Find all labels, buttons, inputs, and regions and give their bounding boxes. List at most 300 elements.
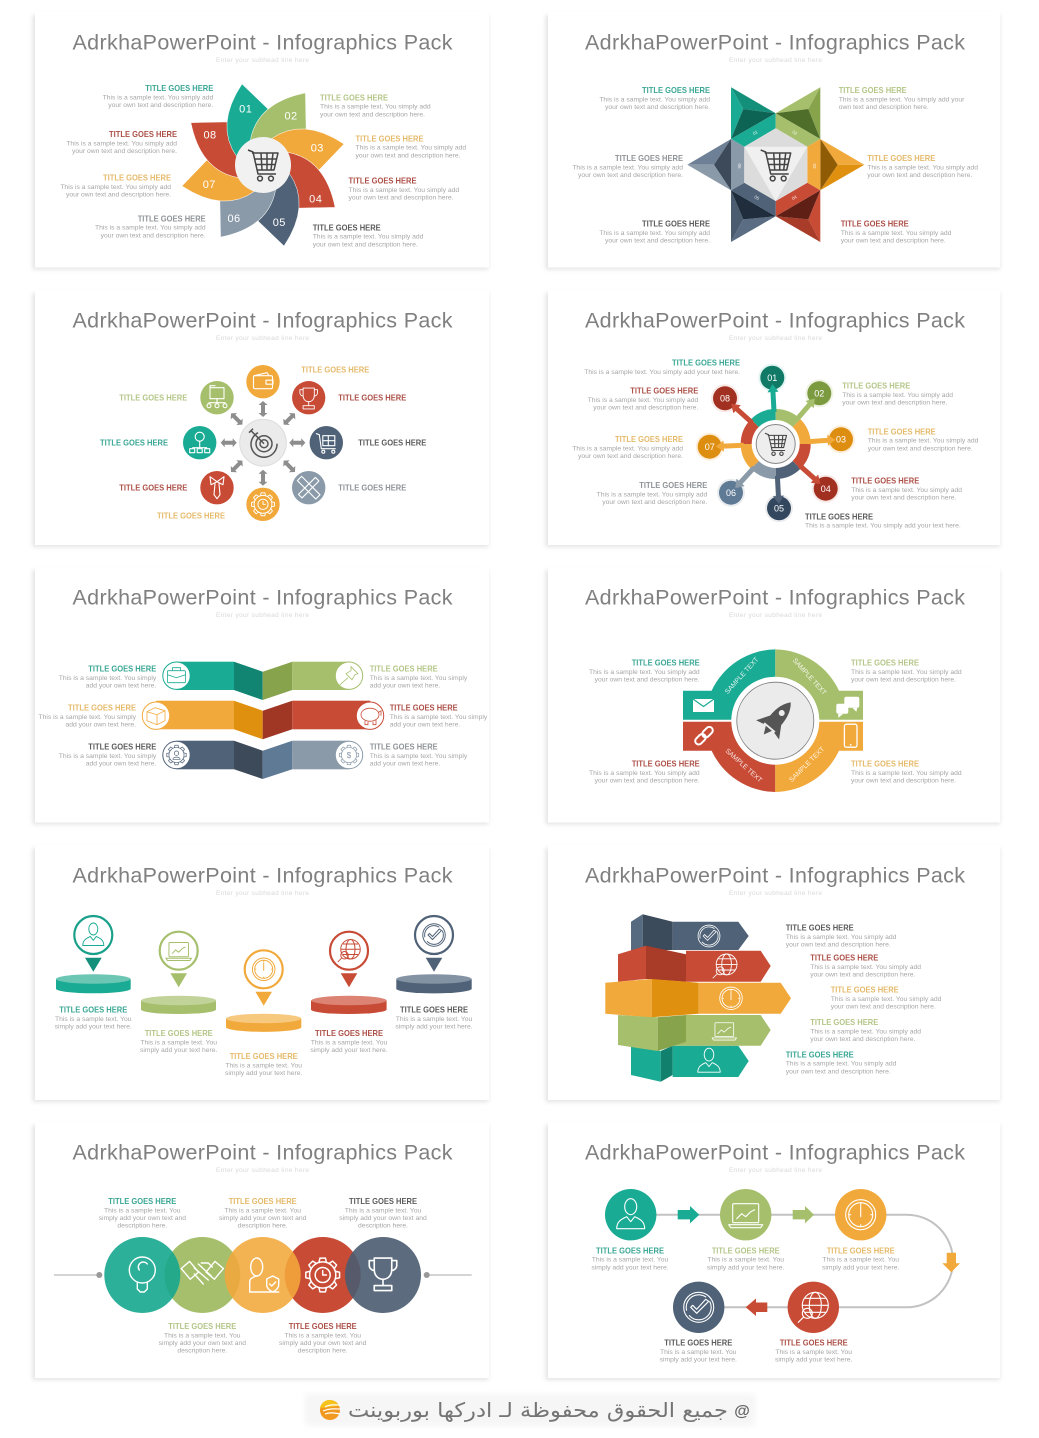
text block 02: This is a sample text. You simply add [320,104,431,111]
text block 2 [159,1321,246,1355]
text block 3: simply add your own text and [219,1215,307,1222]
text block bottom right: TITLE GOES HERE [851,759,919,769]
text block 02: This is a sample text. You simply add your [839,96,965,103]
label: gray tools: TITLE GOES HERE [338,483,407,493]
subheading: Enter your subhead line here [216,335,309,342]
text block 08: TITLE GOES HERE [630,386,699,396]
subheading: Enter your subhead line here [729,890,822,897]
text block 04 [348,176,459,202]
text block 2: simply add your text here. [140,1047,217,1054]
segment labels: SAMPLE TEXT [724,748,763,784]
text block 04: TITLE GOES HERE [841,219,909,229]
icon: gear clock [306,1258,340,1292]
text block 04: This is a sample text. You simply add [348,187,459,194]
icon: trophy [292,381,325,414]
layer: teal [631,1046,749,1082]
panel: slide 2 star [546,12,1000,270]
text block 02: TITLE GOES HERE [842,381,911,391]
text block green: This is a sample text. You simply add [810,1028,921,1035]
text block 2: simply add your own text and [159,1340,246,1347]
text block orange: This is a sample text. You [822,1257,899,1264]
text block 1 [55,1005,132,1031]
text block bottom right: This is a sample text. You simply [370,753,468,760]
ring [741,409,811,479]
text block 04: your own text and description here. [841,238,946,245]
subheading: Enter your subhead line here [729,1167,822,1174]
text block bottom right: TITLE GOES HERE [370,742,438,752]
text block 07: TITLE GOES HERE [615,434,683,444]
icon: check [698,925,720,947]
text block teal: This is a sample text. You [592,1257,669,1264]
petal numbers [203,104,324,229]
arrow teal [678,1206,699,1223]
icon: center target [240,419,286,466]
node numbers: 03 [836,435,846,445]
icon: envelope [693,699,714,712]
text block 03: your own text and description here. [867,172,972,179]
text block bottom left [589,759,700,785]
layer: orange [605,979,791,1017]
text block 01 [103,83,214,109]
text block middle right [390,703,488,729]
text block 04 [851,476,962,502]
text block 05: TITLE GOES HERE [642,219,710,229]
pin 2 [141,932,216,1014]
text block 5: TITLE GOES HERE [400,1005,468,1015]
text block 06: This is a sample text. You simply add [95,225,206,232]
text block orange: simply add your text here. [822,1264,899,1271]
text block teal: This is a sample text. You simply add [786,1061,897,1068]
node numbers: 05 [774,504,784,514]
segment labels: SAMPLE TEXT [788,746,826,784]
icon: tools [292,471,325,504]
petal numbers: 05 [273,217,286,229]
text block green: This is a sample text. You [707,1257,784,1264]
text block green: simply add your text here. [707,1264,784,1271]
text block top right [370,664,468,690]
text block top right: TITLE GOES HERE [851,658,919,668]
text block 1: TITLE GOES HERE [108,1196,177,1206]
text block 06 [572,153,683,179]
double arrows [221,401,305,486]
heading: AdrkhaPowerPoint - Infographics Pack [72,308,453,332]
label: red trophy: TITLE GOES HERE [338,392,407,402]
text block teal: TITLE GOES HERE [596,1245,664,1255]
text block 3: TITLE GOES HERE [229,1196,297,1206]
icon: cart [310,426,343,459]
text block 5: simply add your text here. [395,1024,473,1031]
segment: green [775,649,863,720]
facet numbers: 02 [791,129,799,136]
text block 03: your own text and description here. [356,152,461,159]
text block bottom right [851,759,962,785]
text block middle left: add your own text here. [65,722,136,729]
text block 02: your own text and description here. [842,400,947,407]
text block top left [589,658,700,684]
text block 3: description here. [238,1223,288,1230]
node orange clock [835,1189,886,1240]
panel: slide 3 radial icons [32,290,489,547]
text block top right: TITLE GOES HERE [370,664,438,674]
text block 06 [95,213,206,239]
text block 03 [867,153,978,179]
icon: shopping cart [248,150,278,181]
subheading: Enter your subhead line here [729,335,822,342]
ribbon row 1 [176,662,349,700]
text block 4: TITLE GOES HERE [315,1028,383,1038]
text block 04: TITLE GOES HERE [348,176,417,186]
text block 02 [320,92,431,118]
node green laptop [720,1189,771,1240]
heading: AdrkhaPowerPoint - Infographics Pack [585,308,965,332]
text block bottom right: add your own text here. [370,761,440,768]
facet numbers: 03 [812,163,817,169]
text block 04: your own text and description here. [851,495,956,502]
text block 1 [99,1196,186,1230]
icon: light bulb [129,1257,155,1292]
text block red: TITLE GOES HERE [780,1338,848,1348]
text block top left: add your own text here. [86,683,156,690]
text block 01: This is a sample text. You simply add [599,96,710,103]
pin 4 [311,932,387,1014]
text block 4: simply add your own text and [279,1340,367,1347]
text block green [810,1017,921,1043]
icon: phone [844,724,857,747]
text block 07 [572,434,683,460]
text block 04: This is a sample text. You simply add [851,487,962,494]
text block 2: description here. [177,1348,227,1355]
icon: person [698,1048,720,1072]
text block 08 [66,129,177,155]
heading: AdrkhaPowerPoint - Infographics Pack [585,1140,965,1164]
heading: AdrkhaPowerPoint - Infographics Pack [72,586,453,610]
text block 1: This is a sample text. You [55,1016,132,1023]
text block top right: This is a sample text. You simply [370,675,468,682]
node numbers: 02 [814,389,824,399]
segment: red [683,722,775,792]
icon: laptop [712,1023,737,1040]
arrow green [793,1206,814,1223]
heading: AdrkhaPowerPoint - Infographics Pack [72,864,453,888]
node numbers: 06 [726,488,736,498]
facet numbers: 06 [737,163,742,169]
icon: shopping cart [761,150,791,181]
text block 05: This is a sample text. You simply add [313,234,424,241]
text block 5: This is a sample text. You [345,1207,422,1214]
petal numbers: 01 [239,104,252,116]
text block 07: your own text and description here. [66,192,171,199]
hub center [752,420,800,468]
text block 3: TITLE GOES HERE [230,1051,298,1061]
icon: tie [200,471,234,504]
text block middle right: add your own text here. [390,722,460,729]
text block dark [786,923,897,949]
icon: briefcase [163,662,190,689]
text block 07: This is a sample text. You simply add [572,445,683,452]
text block 05 [313,222,424,248]
footer: copyright strip [305,1394,755,1426]
segment: orange [775,722,863,792]
text block red: your own text and description here. [810,972,915,979]
text block 2: This is a sample text. You [140,1039,217,1046]
text block 01: TITLE GOES HERE [642,85,710,95]
text block 4: TITLE GOES HERE [289,1321,357,1331]
text block 05: your own text and description here. [313,241,418,248]
connector left [54,1272,102,1278]
icon: pushpin [335,662,363,689]
node numbers: 04 [821,484,831,494]
petal numbers: 07 [203,179,216,191]
layer: red [618,946,771,982]
icon: wallet [246,365,280,398]
text block 08: your own text and description here. [72,148,177,155]
petal numbers: 06 [227,213,241,225]
text block orange: TITLE GOES HERE [831,985,899,995]
text block 05 [805,511,961,530]
text block orange: TITLE GOES HERE [827,1245,895,1255]
subheading: Enter your subhead line here [729,612,822,619]
icon: box [142,702,170,729]
petal numbers: 03 [311,143,324,155]
text block 01: This is a sample text. You simply add your text here. [584,369,740,376]
panel: slide 5 folded ribbons [32,567,489,824]
icon: chat bubbles [836,697,859,718]
text block 08: TITLE GOES HERE [109,129,177,139]
text block 04: your own text and description here. [348,195,454,202]
text block 06: your own text and description here. [101,232,206,239]
panel: slide 10 process path [546,1122,1000,1380]
label: orange top: TITLE GOES HERE [301,364,370,374]
ribbon row 3 [176,741,349,779]
text block 06: TITLE GOES HERE [639,480,708,490]
text block red: TITLE GOES HERE [810,953,879,963]
text block orange: your own text and description here. [831,1004,936,1011]
text block 06: This is a sample text. You simply add [572,164,683,171]
text block 03: This is a sample text. You simply add [356,145,466,152]
connector right [424,1272,472,1278]
text block teal [786,1049,897,1075]
text block 1: simply add your own text and [99,1215,186,1222]
petal numbers: 08 [203,130,217,142]
node dark check [673,1282,724,1333]
text block top right: your own text and description here. [851,677,956,684]
arrow red [746,1298,767,1316]
text block dark: This is a sample text. You [660,1349,737,1356]
text block green: TITLE GOES HERE [712,1245,780,1255]
subheading: Enter your subhead line here [216,890,309,897]
text block 02: own text and description here. [839,104,929,111]
layer: dark [631,914,749,952]
text block 01: This is a sample text. You simply add [103,94,214,101]
icon: trophy [369,1258,397,1290]
text block 3 [225,1051,302,1077]
pin 5 [396,916,472,993]
panel: slide 7 pins on discs [32,845,489,1102]
text block 04: This is a sample text. You simply add [841,230,952,237]
text block teal [591,1245,669,1271]
panel: slide 6 rocket circle [546,567,1000,824]
text block dark: TITLE GOES HERE [664,1338,733,1348]
spoke arrows [716,384,836,504]
text block green: TITLE GOES HERE [810,1017,879,1027]
icon: coin badge [335,741,363,769]
text block 04: TITLE GOES HERE [851,476,920,486]
text block 03: TITLE GOES HERE [356,133,424,143]
node red globe [788,1282,839,1333]
text block 05: TITLE GOES HERE [805,511,873,521]
text block 4: This is a sample text. You [311,1039,388,1046]
text block top left: This is a sample text. You simply add [589,669,700,676]
text block 02 [839,85,965,111]
text block 06: your own text and description here. [578,172,683,179]
text block 1: description here. [117,1223,167,1230]
text block middle right: This is a sample text. You simply [390,714,488,721]
text block red: This is a sample text. You [775,1349,852,1356]
text block bottom right [370,742,468,768]
text block 5: description here. [358,1223,408,1230]
text block bottom left: This is a sample text. You simply [59,753,157,760]
text block 1: This is a sample text. You [104,1207,181,1214]
node numbers: 07 [705,442,715,452]
heading: AdrkhaPowerPoint - Infographics Pack [72,1140,453,1164]
text block orange [831,985,942,1011]
text block 5 [395,1005,473,1031]
text block 03: your own text and description here. [868,445,973,452]
text block 01: TITLE GOES HERE [672,358,740,368]
text block 03: This is a sample text. You simply add [868,438,979,445]
text block top left: your own text and description here. [595,677,700,684]
segment labels: SAMPLE TEXT [724,656,760,696]
text block 08: your own text and description here. [593,405,698,412]
icon: gear [246,488,280,521]
subheading: Enter your subhead line here [216,1167,309,1174]
text block 02 [842,381,953,407]
node numbers [705,373,846,514]
text block 2 [140,1028,217,1054]
text block 3: This is a sample text. You [225,1062,302,1069]
segment labels: SAMPLE TEXT [791,657,827,697]
segment: teal [683,649,775,720]
text block red [810,953,921,979]
text block 4: This is a sample text. You [284,1332,361,1339]
text block dark: This is a sample text. You simply add [786,934,897,941]
node numbers: 01 [767,373,777,383]
text block 05 [599,219,710,245]
segment labels [724,656,827,784]
text block middle right: TITLE GOES HERE [390,703,458,713]
node teal person [605,1189,656,1240]
text block teal: simply add your text here. [591,1264,669,1271]
text block 08: This is a sample text. You simply add [66,140,177,147]
icon: coin badge: $ [347,751,352,760]
subheading: Enter your subhead line here [216,612,309,619]
text block 01: your own text and description here. [605,104,710,111]
text block 4 [310,1028,388,1054]
text block middle left: This is a sample text. You simply [38,714,137,721]
text block 5: This is a sample text. You [396,1016,473,1023]
text block bottom right: This is a sample text. You simply add [851,770,962,777]
text block teal: TITLE GOES HERE [786,1049,854,1059]
text block 05: This is a sample text. You simply add your text here. [805,523,961,530]
text block 07: your own text and description here. [578,453,683,460]
node circles [696,364,855,522]
arrow orange [942,1253,960,1272]
text block 2: This is a sample text. You [164,1332,241,1339]
text block 01 [584,358,740,376]
panel: slide 4 hub and spokes [546,290,1000,547]
text block bottom left: your own text and description here. [595,778,700,785]
text block 3: simply add your text here. [225,1070,302,1077]
text block 05: your own text and description here. [605,238,710,245]
text block 06 [597,480,708,506]
text block green: your own text and description here. [810,1036,915,1043]
text block 03: TITLE GOES HERE [868,426,936,436]
text block 08 [588,386,699,412]
text block 05: This is a sample text. You simply add [599,230,710,237]
text block 02: TITLE GOES HERE [839,85,907,95]
ribbon row 2 [156,701,370,739]
text block top left: TITLE GOES HERE [632,658,700,668]
subheading: Enter your subhead line here [216,57,309,64]
panel: slide 1 pinwheel [32,12,489,270]
label: dark cart: TITLE GOES HERE [358,437,427,447]
text block 06: TITLE GOES HERE [138,213,206,223]
text block 03: TITLE GOES HERE [867,153,936,163]
text block 02: This is a sample text. You simply add [842,392,953,399]
text block 4 [279,1321,367,1355]
icon: person with shield [250,1258,279,1292]
icon: chain link [694,725,714,746]
text block 3: This is a sample text. You [224,1207,301,1214]
text block bottom left: TITLE GOES HERE [88,742,157,752]
text block 5 [339,1196,427,1230]
text block top left: This is a sample text. You simply [59,675,157,682]
text block top right: This is a sample text. You simply add [851,669,962,676]
facet numbers: 04 [791,194,798,201]
layer: green [618,1015,771,1051]
icon: clock [720,987,742,1010]
text block 5: TITLE GOES HERE [349,1196,417,1206]
text block top left: TITLE GOES HERE [88,664,157,674]
text block 03 [356,133,466,159]
icon: globe [713,954,737,978]
text block 4: simply add your text here. [310,1047,388,1054]
text block red: This is a sample text. You simply add [810,964,921,971]
text block 06: This is a sample text. You simply add [597,491,708,498]
text block 07 [60,173,171,199]
icon: rocket [752,693,802,744]
text block 1: TITLE GOES HERE [59,1005,128,1015]
icon: org board [200,381,234,414]
text block green [707,1245,784,1271]
text block 07: TITLE GOES HERE [103,173,171,183]
text block orange [822,1245,899,1271]
node numbers: 08 [720,394,730,404]
text block 03: This is a sample text. You simply add [867,164,978,171]
petal numbers: 04 [309,194,322,206]
text block middle left [38,703,137,729]
text block 05: TITLE GOES HERE [313,222,381,232]
text block 02: your own text and description here. [320,111,425,118]
heading: AdrkhaPowerPoint - Infographics Pack [72,30,453,54]
text block 01 [599,85,710,111]
text block red [775,1338,852,1364]
heading: AdrkhaPowerPoint - Infographics Pack [585,30,965,54]
text block orange: This is a sample text. You simply add [831,996,942,1003]
petal numbers: 02 [284,111,298,123]
text block dark [660,1338,737,1364]
facet numbers: 01 [752,129,759,136]
